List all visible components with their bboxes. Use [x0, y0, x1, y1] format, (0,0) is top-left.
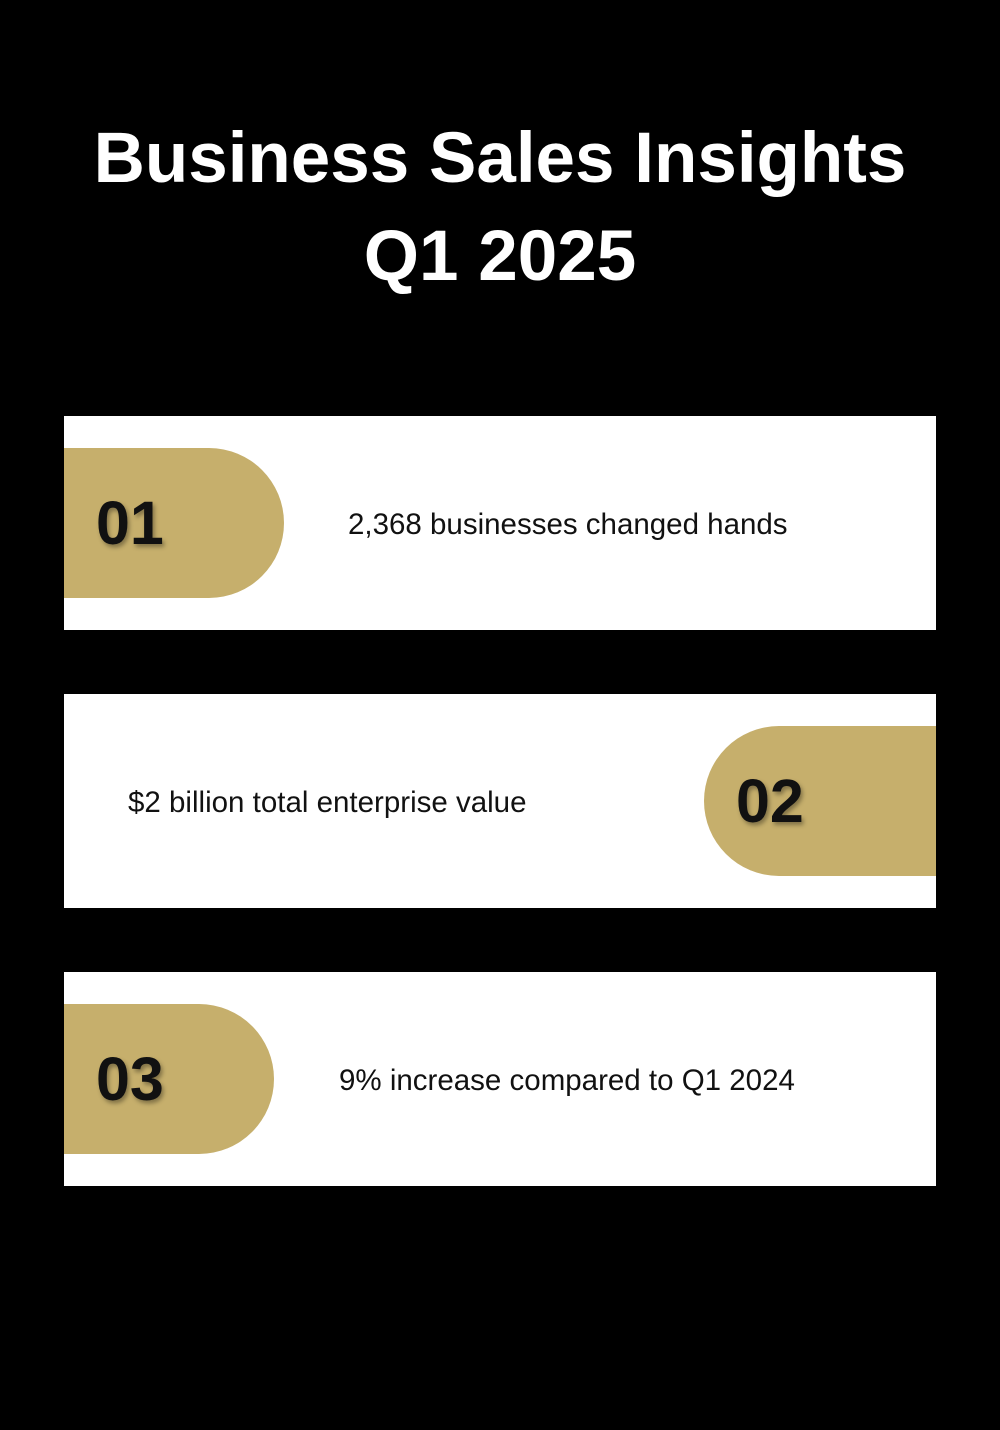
title: Q1 2025 [364, 217, 636, 296]
badge 01 [64, 448, 284, 598]
badge 02 [704, 726, 936, 876]
title [94, 119, 906, 296]
badge 01: 01 [96, 489, 164, 557]
text 01: 2,368 businesses changed hands [348, 508, 788, 541]
badge 03 [64, 1004, 274, 1154]
panel: card 01 [64, 416, 936, 630]
title: Business Sales Insights [94, 119, 906, 198]
text 03: 9% increase compared to Q1 2024 [339, 1064, 795, 1097]
badge 03: 03 [96, 1045, 164, 1113]
panel: card 02 [64, 694, 936, 908]
badge 02: 02 [736, 767, 804, 835]
text 02: $2 billion total enterprise value [128, 786, 526, 819]
panel: card 03 [64, 972, 936, 1186]
